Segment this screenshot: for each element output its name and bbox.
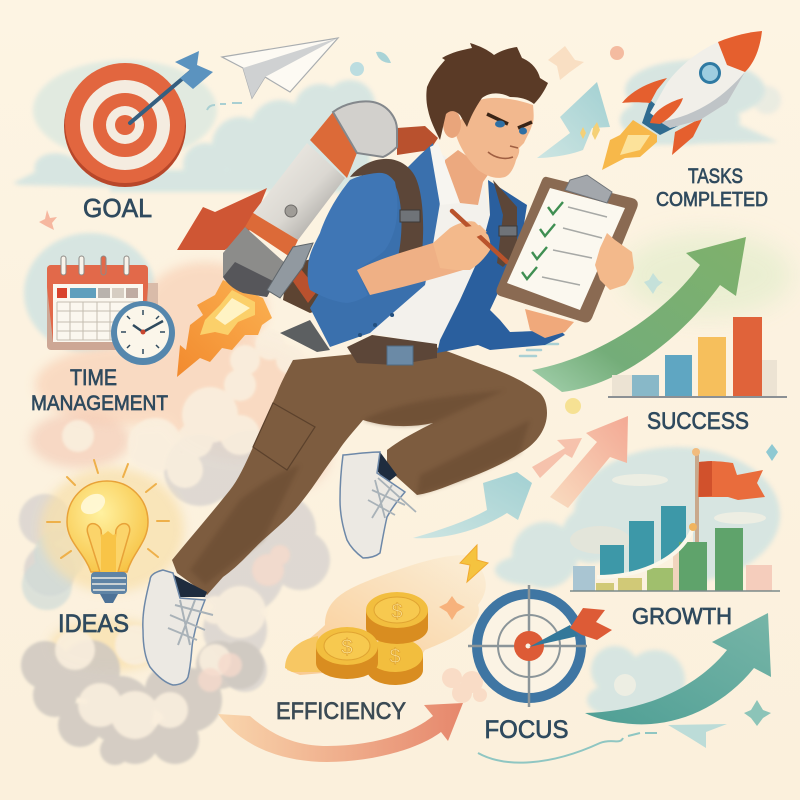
neck [445, 150, 490, 205]
icon: paper plane [222, 38, 338, 98]
belt [347, 335, 437, 365]
front shoe [340, 452, 405, 558]
belt buckle [387, 346, 413, 365]
arrows: pastel rising [413, 416, 628, 538]
right hand [595, 233, 634, 290]
label: efficiency: EFFICIENCY [276, 698, 406, 725]
label: tasks completed [656, 165, 768, 211]
right backpack strap [493, 180, 517, 267]
clipboard paper [507, 188, 625, 310]
decor: pale peach puffs [442, 668, 487, 703]
label: time management: TIME [70, 365, 117, 390]
back laces [168, 600, 213, 645]
icon: coins: $ [389, 646, 401, 668]
jetpack upper band [310, 112, 357, 178]
checklist checks [522, 202, 563, 279]
fingers over pen [458, 225, 487, 240]
label: time management [31, 365, 168, 415]
clipboard clip [565, 175, 612, 203]
back shoe [143, 570, 205, 685]
forearm [357, 243, 463, 295]
icon: target [64, 51, 213, 187]
chart: growth bars with flag [570, 448, 780, 591]
cargo pocket [253, 403, 315, 470]
pants shading [190, 390, 530, 585]
arrow: teal behind rocket [537, 82, 610, 158]
character [143, 43, 638, 685]
white shirt [367, 147, 490, 345]
icon: calendar and clock [47, 256, 175, 365]
icon: rocket [580, 31, 762, 170]
arrow: growth teal [585, 613, 771, 724]
buttons [360, 315, 392, 335]
jetpack body [253, 143, 345, 240]
label: ideas: IDEAS [58, 610, 129, 638]
checklist lines [542, 207, 607, 285]
arrow: small teal [668, 724, 727, 748]
jacket right panel [437, 180, 565, 353]
back leg and front leg [172, 345, 547, 595]
wrist under clipboard [525, 309, 574, 338]
ear [443, 110, 461, 138]
icon: light bulb [47, 460, 169, 603]
arrow: success green [532, 237, 746, 392]
jetpack lower band [245, 213, 298, 257]
jacket left panel [310, 143, 440, 347]
icon: coins: $ [391, 601, 403, 623]
label: growth: GROWTH [632, 603, 732, 629]
icon: coins: $ [341, 636, 353, 659]
left backpack strap [350, 159, 423, 267]
pen [452, 211, 507, 262]
arrow: efficiency swoosh [218, 703, 463, 762]
clipboard board [496, 177, 638, 322]
back sock [174, 575, 207, 597]
label: goal: GOAL [83, 193, 152, 223]
face [456, 98, 534, 178]
icon: focus target [468, 585, 612, 707]
hand with pen [433, 221, 490, 270]
jetpack cap [333, 101, 397, 157]
decorative dots [39, 46, 778, 461]
icon: lightning and sparkle [439, 545, 488, 620]
peach glow behind coins [287, 555, 486, 675]
front sock [375, 452, 397, 483]
icon: sparkle teal [744, 700, 771, 726]
label: tasks completed: TASKS [688, 165, 743, 188]
jetpack lower orange and pack bottom [283, 250, 350, 313]
front laces [368, 478, 416, 518]
squiggle [478, 733, 657, 763]
chart: success bars [608, 317, 787, 397]
shirt sliver [430, 143, 460, 205]
label: success: SUCCESS [647, 408, 749, 435]
jacket back hem [280, 320, 330, 352]
label: focus: FOCUS [484, 716, 568, 744]
hair [426, 43, 548, 140]
red tube behind [397, 126, 438, 155]
jetpack bracket [267, 243, 313, 298]
icon: flame [177, 280, 272, 377]
jetpack wing [177, 188, 267, 250]
label: tasks completed: COMPLETED [656, 189, 768, 211]
jetpack nozzle [223, 227, 285, 297]
sleeve [308, 173, 397, 303]
label: time management: MANAGEMENT [31, 392, 168, 415]
icon: coins [285, 592, 428, 685]
brows and eyes [487, 114, 532, 128]
